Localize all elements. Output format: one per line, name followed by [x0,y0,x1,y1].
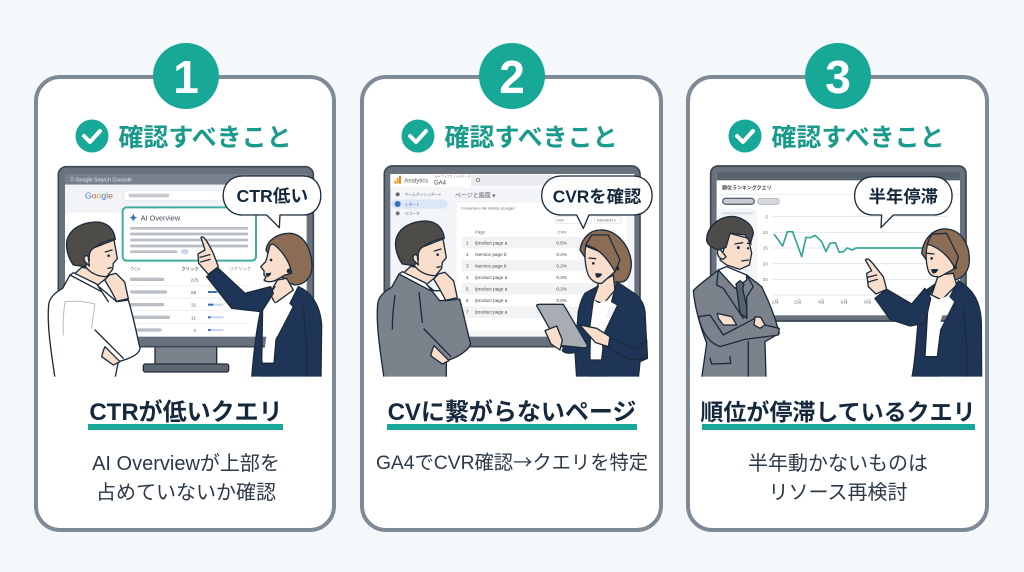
monitor 2: /product page a [475,286,508,291]
monitor 2: /service page b [475,252,507,257]
monitor 2: レポート [405,201,420,206]
monitor 2: 0.5% [556,240,567,245]
monitor 2: GA4 ウェブサイトのデータ [434,174,471,179]
title 3: 順位が停滞しているクエリ [700,399,976,425]
heading: check 1: 確認すべきこと [118,124,292,152]
monitor 2: 2 [466,252,469,257]
chart: flat rank line [774,232,923,257]
description 3 [748,452,928,504]
monitor 2: CVR [557,218,564,222]
description 1: 占めていないか確認 [96,481,276,504]
title 2: CVに繋がらないページ [388,398,636,426]
illustration: monitor with rank chart and two people [693,166,982,378]
monitor 3: 30 [763,277,768,282]
panel: step 3 [688,43,987,530]
description 1 [92,452,280,504]
heading: check 2: 確認すべきこと [444,124,618,152]
monitor 1: ⠿ Google Search Console [70,177,132,183]
monitor 2: 0.2% [556,286,567,291]
panel: step 1 [36,43,334,530]
monitor 3: 15 [763,246,768,251]
monitor 3: 1月 [772,299,779,305]
description 2: GA4でCVR確認→クエリを特定 [376,447,648,475]
monitor 1: リアリック [229,267,251,273]
monitor 2: S/M/1/B/32 ▾ [597,218,616,222]
number badge 2 [479,43,545,109]
panel: step 2 [362,43,661,530]
number badge 2: 2 [499,51,525,103]
description 3: リソース再検討 [768,481,908,504]
person: man with crossed arms [693,216,779,378]
description 1: AI Overviewが上部を [92,452,280,475]
speech bubble: CTR低い: CTR低い [237,186,308,206]
monitor 1: 225 [191,277,199,282]
monitor 3: 8月 [864,299,871,305]
monitor 3: 6月 [841,299,848,305]
number badge 1: 1 [173,51,199,103]
monitor 3: 10 [763,230,768,235]
monitor 1: 3 [193,328,196,333]
monitor 2: Analytics [404,178,428,184]
monitor 2: 0.2% [556,263,567,268]
heading: check 2 [402,120,618,152]
heading: check 3: 確認すべきこと [771,124,945,152]
monitor 2: 3 [466,263,469,268]
person: man in white shirt [48,222,140,378]
monitor 2: Page [475,229,486,234]
speech bubble: 半年停滞: 半年停滞 [869,187,938,207]
speech bubble: 半年停滞 [855,177,952,228]
number badge 3 [805,43,871,109]
monitor 1 [58,167,313,372]
monitor 3: 4月 [817,299,825,305]
monitor 3: 20 [763,261,768,266]
monitor 2: 4 [466,275,469,280]
monitor 1: クCV [130,267,140,273]
monitor 1: クリック [181,266,199,273]
monitor 1: 68 [191,290,197,295]
monitor 1: 31 [191,303,197,308]
monitor 2: ロゴーダ [405,211,420,216]
monitor 3: 2月 [794,299,801,305]
title 1: CTRが低いクエリ [89,398,283,426]
AI Overview box: AI Overview [141,213,181,222]
number badge 3: 3 [825,51,851,103]
speech bubble: CVRを確認 [542,176,652,228]
monitor 2: 0.2% [556,252,567,257]
number badge 1 [153,43,219,109]
monitor 2: ホームダッシュボード [405,192,442,197]
illustration: monitor with Search Console and two people [48,167,322,378]
heading: check 3 [728,120,945,152]
monitor 3: 5 [765,214,768,219]
monitor 2: /product page a [475,275,508,280]
speech bubble: CTR低い [223,176,321,228]
monitor 2: /service page b [475,263,507,268]
monitor 2: /product page a [475,240,508,245]
monitor 3: 順位ランキングクエリ [722,184,772,191]
monitor 2: 5 [466,286,469,291]
monitor 2: 1 [466,240,469,245]
person: woman with tablet [537,230,647,378]
person: woman in navy jacket [198,233,322,378]
monitor 1: Google [85,191,113,201]
monitor 2: 6 [466,298,469,303]
monitor 2: /product page a [475,298,508,303]
speech bubble: CVRを確認: CVRを確認 [553,186,642,206]
monitor 1: 11 [191,315,196,320]
person: woman pointing [865,229,982,378]
monitor 2: 0.0% [556,298,567,303]
monitor 2: Conversion rate metrics at pages [461,207,515,211]
AI Overview box [123,207,256,261]
monitor 2: /product page a [475,310,508,315]
heading: check 1 [76,120,292,152]
person: man in grey suit [377,221,471,378]
monitor 2: 7 [466,310,469,315]
description 3: 半年動かないものは [748,452,928,475]
monitor 2: 0.2% [556,275,567,280]
monitor 2: ページと画面 ▾ [455,192,495,199]
monitor 2: CVR [558,229,566,234]
monitor 2 [384,166,640,347]
illustration: monitor with GA4 and two people [377,166,652,378]
monitor 3 [711,166,966,321]
monitor 2: GA4 [434,180,447,186]
